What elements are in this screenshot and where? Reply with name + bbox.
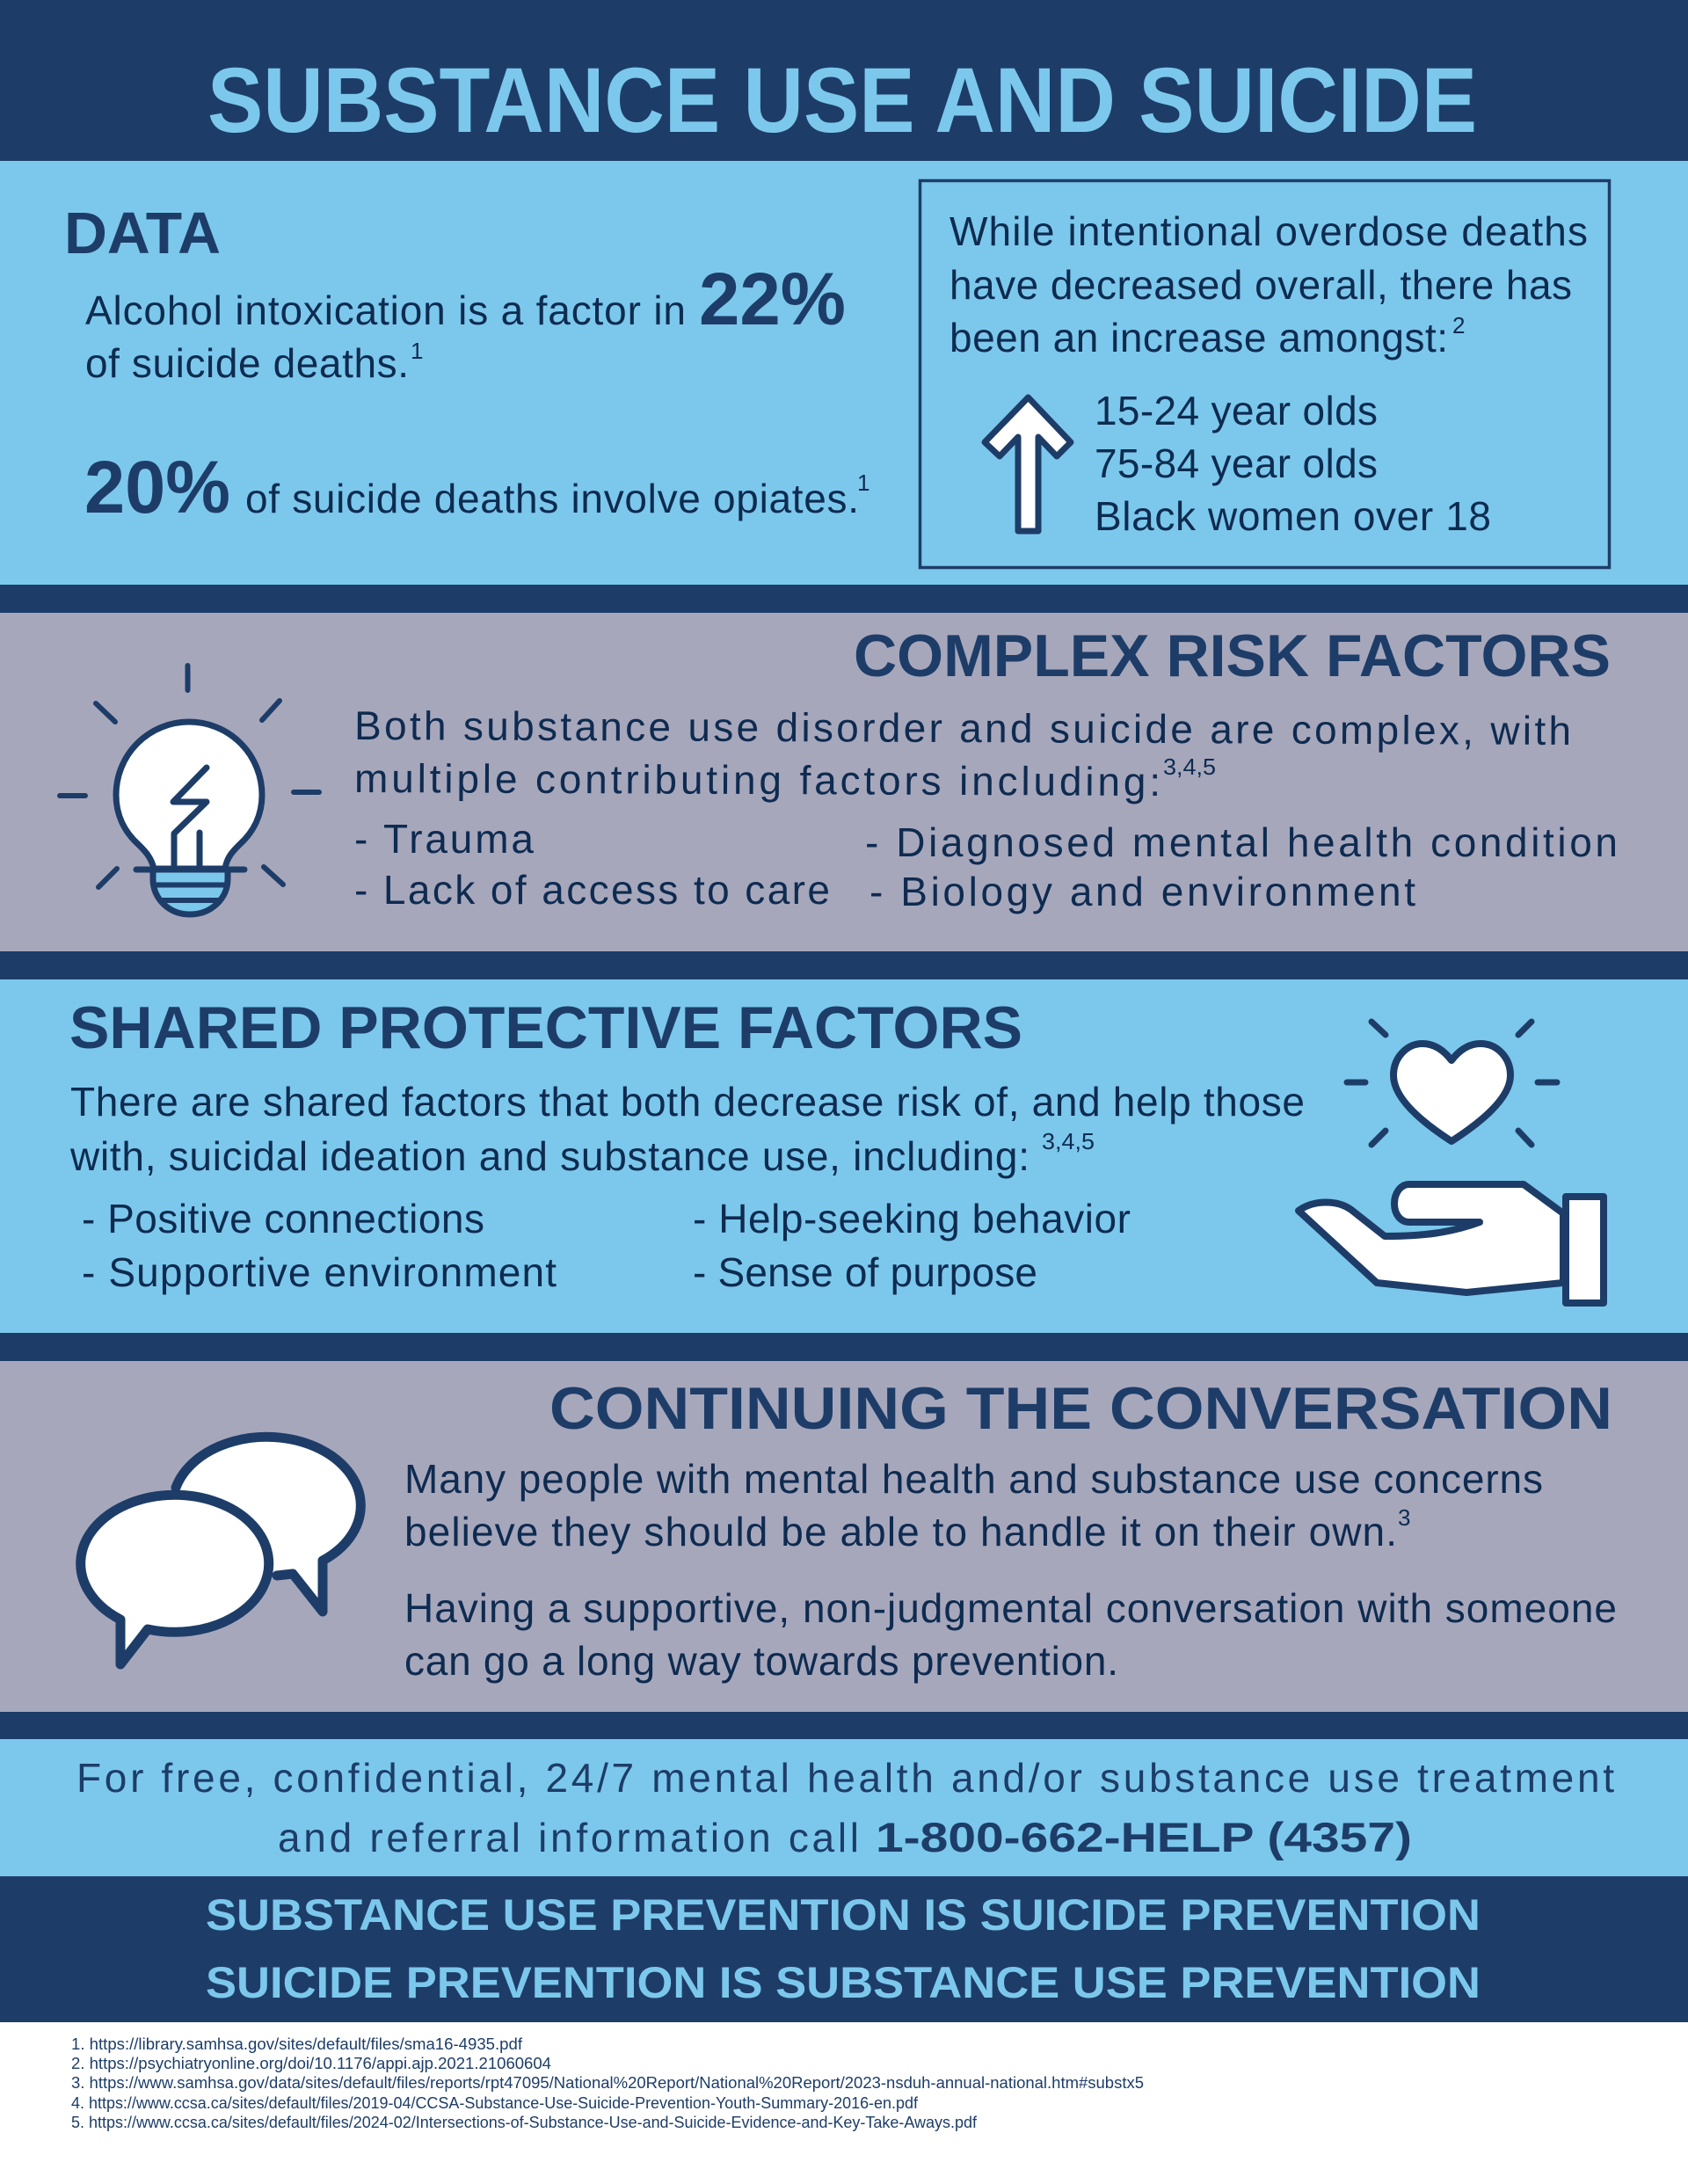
stat: opiates 20%: 20% [84, 446, 230, 528]
list: protective factors: - Supportive environment [82, 1249, 557, 1295]
heading: shared protective factors: SHARED PROTECTIVE FACTORS [69, 994, 1022, 1061]
footnotes: 3. https://www.samhsa.gov/data/sites/default/files/reports/rpt47095/National%20Report/National%20Report/2023-nsduh-annual-national.htm#substx5 [71, 2074, 1144, 2092]
stat: opiates 20%: 1 [857, 470, 869, 496]
list: risk factors: - Lack of access to care [354, 867, 830, 913]
helpline text: For free, confidential, 24/7 mental health and/or substance use treatment [76, 1755, 1614, 1801]
helpline number: 1-800-662-HELP (4357) [876, 1814, 1412, 1860]
stat: alcohol intoxication 22%: Alcohol intoxication is a factor in [85, 288, 686, 333]
helpline number: and referral information call [278, 1815, 859, 1860]
panel: helpline [0, 1739, 1688, 1876]
callout text [950, 208, 1588, 360]
panel: data [0, 161, 1688, 585]
intro text: multiple contributing factors including: [354, 755, 1160, 804]
panel: continuing the conversation [0, 1361, 1688, 1712]
intro text: 3,4,5 [1163, 753, 1216, 780]
helpline number [278, 1814, 1412, 1860]
stat: alcohol intoxication 22%: 22% [699, 258, 846, 340]
stat: alcohol intoxication 22%: of suicide deaths. [85, 340, 409, 386]
intro text: Both substance use disorder and suicide are complex, with [354, 703, 1571, 753]
intro text: There are shared factors that both decrease risk of, and help those [70, 1079, 1305, 1125]
stat: alcohol intoxication 22%: 1 [411, 338, 423, 364]
intro text [354, 703, 1571, 804]
list: protective factors: - Sense of purpose [693, 1249, 1037, 1295]
text: supportive conversation: can go a long way towards prevention. [404, 1638, 1118, 1684]
callout text: While intentional overdose deaths [950, 208, 1588, 254]
text: handling it alone: believe they should be able to handle it on their own. [404, 1509, 1397, 1554]
callout text: 2 [1452, 312, 1465, 339]
icon: speech bubbles [81, 1437, 360, 1664]
footnotes: 2. https://psychiatryonline.org/doi/10.1176/appi.ajp.2021.21060604 [71, 2055, 551, 2072]
list: protective factors: - Positive connections [82, 1196, 484, 1241]
list: risk factors: - Biology and environment [869, 869, 1415, 914]
closing statement [206, 1890, 1481, 2007]
list: protective factors: - Help-seeking behavior [693, 1196, 1131, 1241]
callout: overdose increase [920, 181, 1609, 568]
stat: opiates 20%: of suicide deaths involve opiates. [245, 476, 859, 521]
callout text: have decreased overall, there has [950, 262, 1572, 308]
text: handling it alone [404, 1456, 1543, 1554]
icon: hand holding heart [1299, 1022, 1604, 1303]
text: supportive conversation [404, 1585, 1617, 1684]
panel: shared protective factors [0, 979, 1688, 1333]
icon: up arrow [985, 397, 1071, 531]
callout text: been an increase amongst: [950, 315, 1448, 360]
footnotes [71, 2035, 1144, 2131]
list: groups with increases: Black women over 18 [1095, 493, 1491, 539]
title: SUBSTANCE USE AND SUICIDE [207, 49, 1477, 152]
list: groups with increases: 15-24 year olds [1095, 388, 1378, 433]
panel: complex risk factors [0, 613, 1688, 951]
intro text [69, 1079, 1305, 1179]
intro text: 3,4,5 [1042, 1128, 1095, 1154]
heading: continuing the conversation: CONTINUING THE CONVERSATION [549, 1375, 1612, 1442]
footnotes: 1. https://library.samhsa.gov/sites/default/files/sma16-4935.pdf [71, 2035, 523, 2053]
icon: light bulb [60, 666, 319, 914]
text: supportive conversation: Having a supportive, non-judgmental conversation with someone [404, 1585, 1617, 1631]
closing statement: SUBSTANCE USE PREVENTION IS SUICIDE PREVENTION [206, 1890, 1481, 1940]
stat: opiates 20% [84, 446, 869, 528]
list: protective factors [82, 1196, 1131, 1295]
list: groups with increases: 75-84 year olds [1095, 440, 1378, 486]
heading: data: DATA [64, 200, 221, 266]
list: groups with increases [1095, 388, 1491, 539]
text: handling it alone: Many people with mental health and substance use concerns [404, 1456, 1543, 1502]
text: handling it alone: 3 [1398, 1504, 1410, 1531]
intro text: with, suicidal ideation and substance use, including: [69, 1133, 1030, 1179]
stat: alcohol intoxication 22% [85, 258, 846, 386]
list: risk factors: - Diagnosed mental health condition [865, 819, 1618, 865]
list: risk factors [354, 816, 1618, 914]
heading: complex risk factors: COMPLEX RISK FACTORS [854, 622, 1611, 689]
list: risk factors: - Trauma [354, 816, 534, 862]
footnotes: 4. https://www.ccsa.ca/sites/default/files/2019-04/CCSA-Substance-Use-Suicide-Prevention-Youth-Summary-2016-en.pdf [71, 2094, 919, 2112]
footnotes: 5. https://www.ccsa.ca/sites/default/files/2024-02/Intersections-of-Substance-Use-and-Suicide-Evidence-and-Key-Take-Aways.pdf [71, 2114, 978, 2131]
closing statement: SUICIDE PREVENTION IS SUBSTANCE USE PREVENTION [206, 1958, 1481, 2007]
